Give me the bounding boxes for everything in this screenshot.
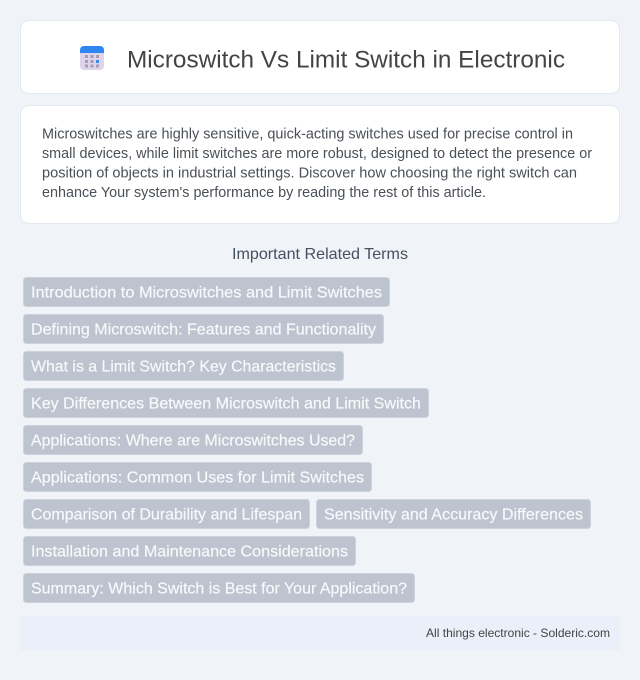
heading: related terms: Important Related Terms (232, 246, 408, 263)
tag list: related terms (24, 278, 590, 602)
tag: microswitch applications (24, 426, 362, 454)
tag: sensitivity: Sensitivity and Accuracy Differences (324, 506, 583, 524)
tag: defining microswitch: Defining Microswitch: Features and Functionality (31, 322, 376, 338)
tag: key differences (24, 388, 428, 418)
tag: limit switch applications: Applications: Common Uses for Limit Switches (31, 470, 364, 486)
icon: calendar keypad (80, 46, 104, 70)
tag: summary: Summary: Which Switch is Best for Your Application? (31, 580, 407, 598)
text block: introduction paragraph: enhance Your system's performance by reading the rest of this article. (42, 185, 486, 201)
tag: installation: Installation and Maintenance Considerations (31, 544, 348, 560)
title: Microswitch Vs Limit Switch in Electronic (127, 46, 565, 74)
tag: installation (24, 536, 356, 566)
panel: introduction (20, 106, 620, 224)
tag: microswitch applications: Applications: Where are Microswitches Used? (31, 432, 355, 450)
tag: introduction (24, 278, 390, 306)
tag: durability: Comparison of Durability and Lifespan (31, 506, 302, 524)
text block: introduction paragraph (42, 126, 592, 201)
text block: introduction paragraph: Microswitches are highly sensitive, quick-acting switches used for precise control in (42, 126, 573, 142)
text block: introduction paragraph: small devices, while limit switches are more robust, designed to detect the presence or (42, 146, 592, 162)
tag: introduction: Introduction to Microswitches and Limit Switches (31, 284, 382, 302)
tag: limit switch applications (24, 462, 372, 492)
text block: introduction paragraph: position of objects in industrial settings. Discover how choosing the right switch can (42, 166, 577, 182)
tag: durability (24, 500, 310, 528)
panel: title header (20, 20, 620, 94)
tag: summary (24, 574, 414, 602)
tag: key differences: Key Differences Between Microswitch and Limit Switch (31, 396, 421, 412)
tag: limit switch: What is a Limit Switch? Key Characteristics (31, 358, 336, 376)
footer credit: All things electronic - Solderic.com (426, 626, 610, 640)
tag: limit switch (24, 352, 344, 380)
tag: defining microswitch (24, 314, 384, 344)
footer (20, 616, 620, 650)
tag: sensitivity (316, 500, 590, 528)
